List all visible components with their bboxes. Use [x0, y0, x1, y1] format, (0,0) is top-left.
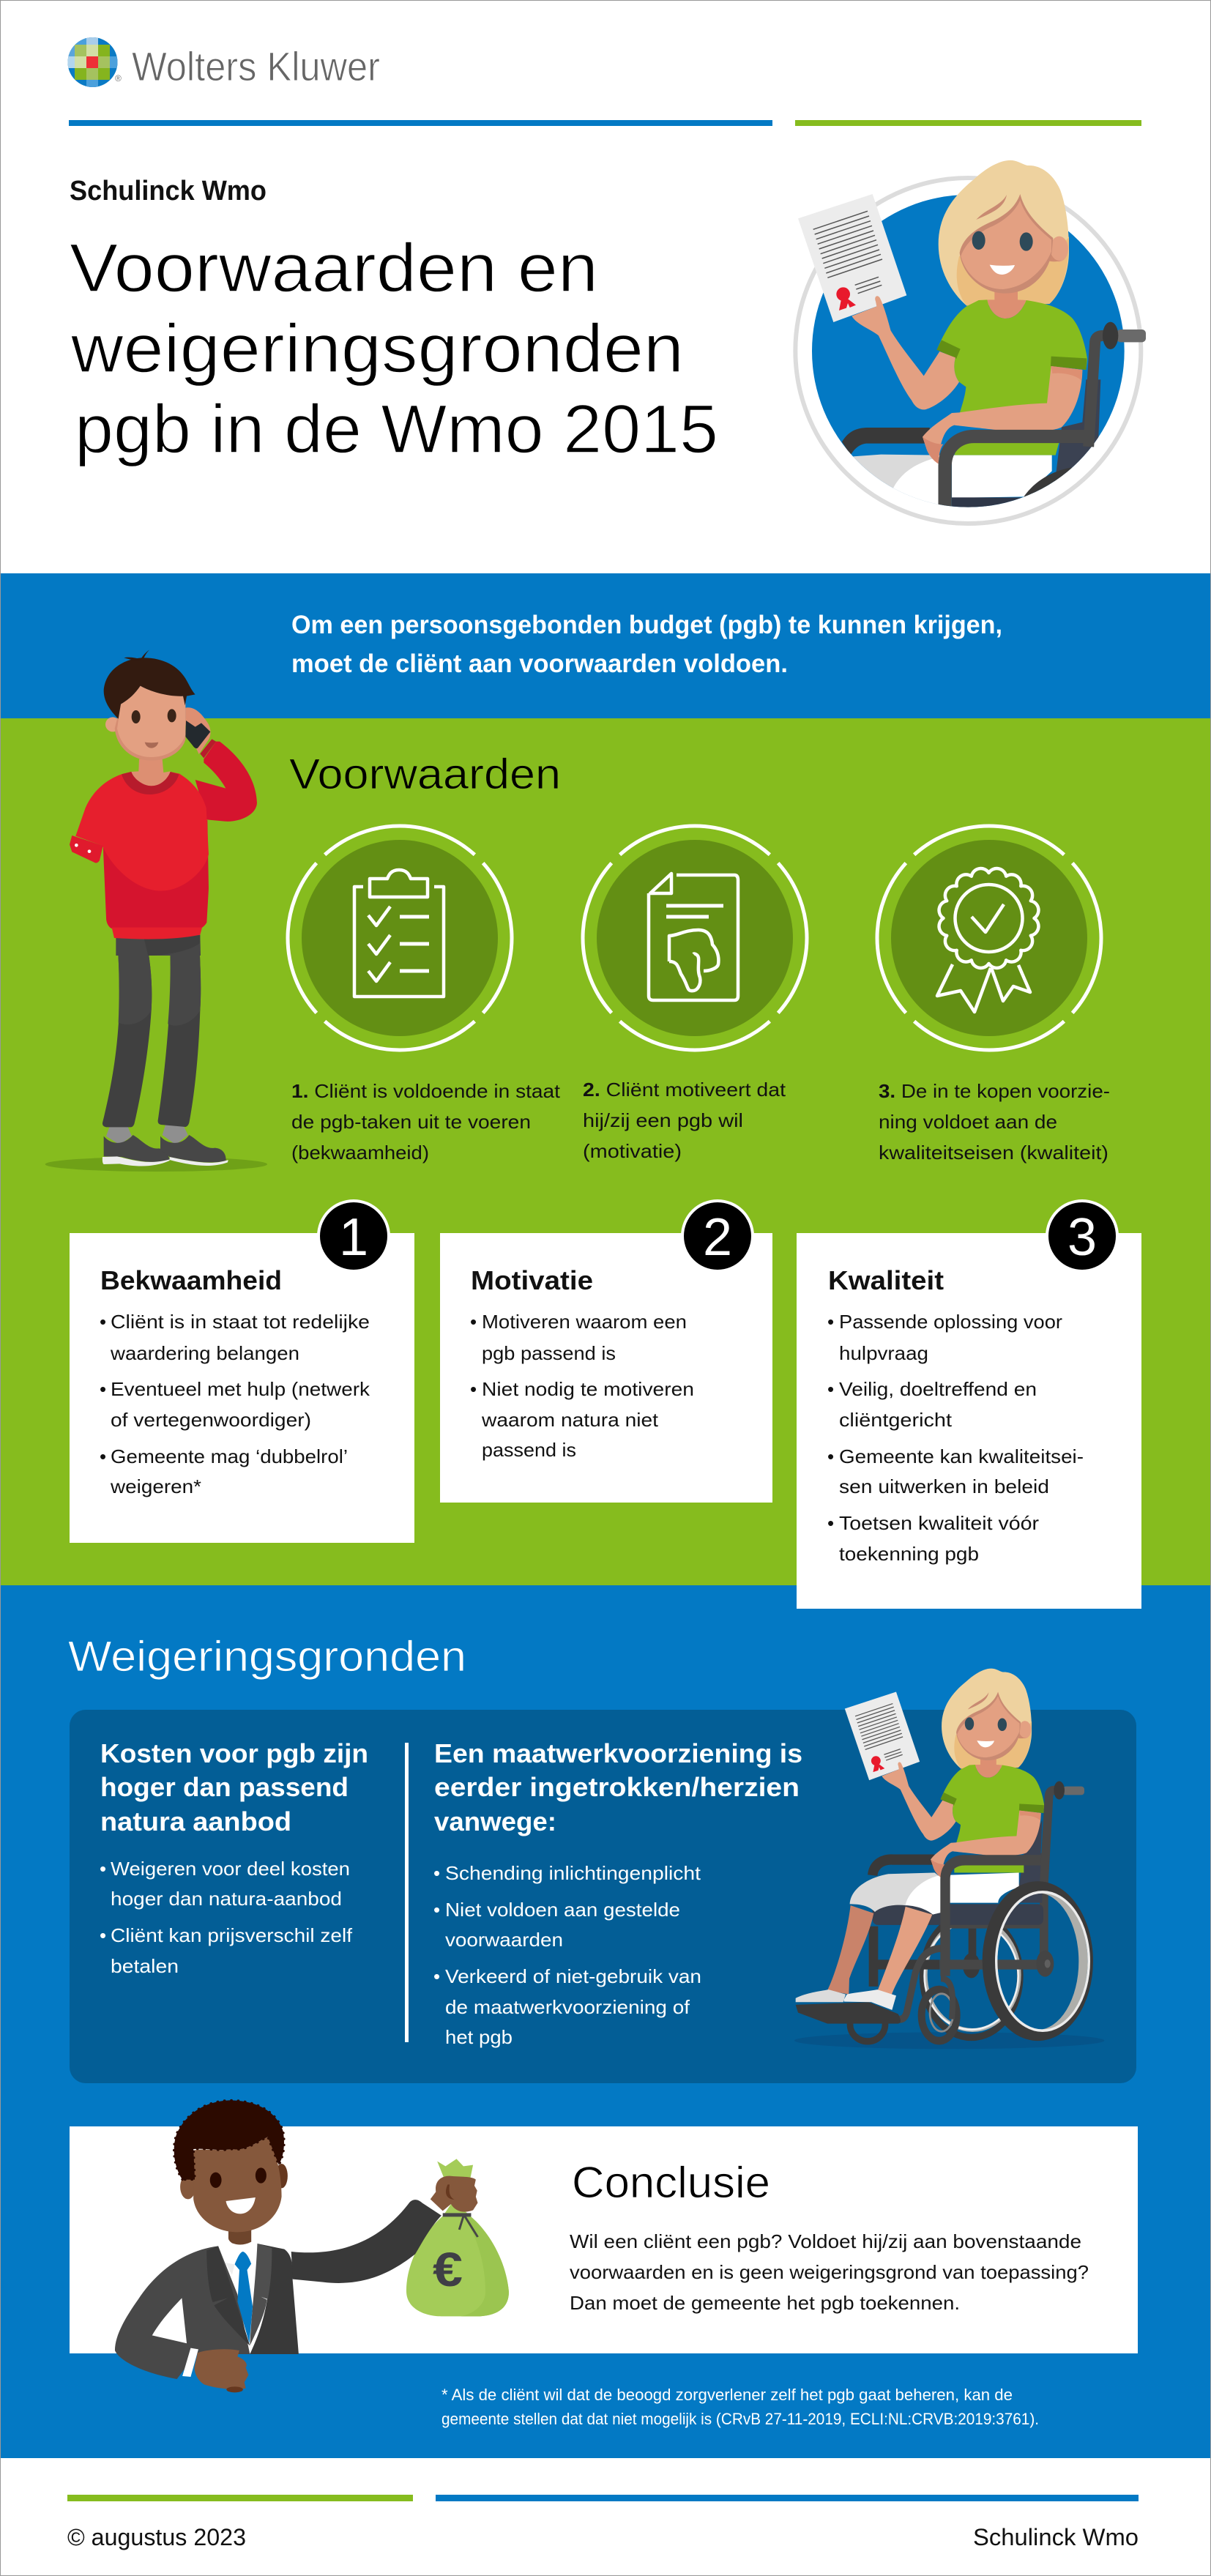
eyebrow: Schulinck Wmo: Schulinck Wmo: [70, 176, 267, 206]
illustration: woman in wheelchair holding certificate, in circle: [795, 160, 1146, 524]
footnote: gemeente stellen dat dat niet mogelijk is (CRvB 27-11-2019, ECLI:NL:CRVB:2019:3761).: [441, 2410, 1039, 2428]
card 3 bullets: Gemeente kan kwaliteitsei-: [839, 1445, 1084, 1467]
footer: brand: Schulinck Wmo: [973, 2524, 1139, 2550]
illustration: man on the phone in red sweater: [45, 649, 267, 1172]
footer rule bars: [67, 2495, 1139, 2501]
column 2 bullets: •: [433, 1965, 440, 1987]
column 1 heading: [100, 1738, 368, 1836]
card 3 bullets: cliëntgericht: [839, 1409, 953, 1431]
column 2 bullets: de maatwerkvoorziening of: [445, 1996, 690, 2018]
column 2 heading: Een maatwerkvoorziening is: [434, 1738, 802, 1768]
top rule bars: [69, 120, 1141, 126]
icon: checklist clipboard in circle: [288, 826, 512, 1050]
caption 1: 1. Cliënt is voldoende in staat: [291, 1080, 561, 1102]
conclusion text: Dan moet de gemeente het pgb toekennen.: [570, 2292, 960, 2314]
card: Motivatie: [440, 1199, 772, 1503]
caption 2: [583, 1079, 786, 1162]
card 1 bullets: •: [100, 1445, 106, 1467]
caption 2: (motivatie): [583, 1140, 682, 1162]
card 1 bullets: •: [100, 1378, 106, 1400]
card 3 bullets: •: [827, 1311, 834, 1333]
card 2 bullets: pgb passend is: [482, 1342, 616, 1364]
caption 2: hij/zij een pgb wil: [583, 1109, 743, 1131]
illustration: businessman with money bag: [115, 2100, 509, 2392]
card 3 bullets: •: [827, 1378, 834, 1400]
card 2 bullets: Niet nodig te motiveren: [482, 1378, 694, 1400]
column 2 bullets: •: [433, 1899, 440, 1921]
column 2 heading: eerder ingetrokken/herzien: [434, 1772, 800, 1802]
card 2 bullets: passend is: [482, 1439, 576, 1461]
intro text: moet de cliënt aan voorwaarden voldoen.: [291, 649, 788, 678]
card 1 bullets: •: [100, 1311, 106, 1333]
card 3 bullets: •: [827, 1445, 834, 1467]
euro sign: €: [433, 2242, 463, 2296]
column 1 bullets: •: [100, 1924, 106, 1946]
column 1 bullets: Weigeren voor deel kosten: [111, 1858, 350, 1880]
caption 3: [879, 1080, 1110, 1164]
column 2 bullets: voorwaarden: [445, 1929, 563, 1951]
badge 3: [1046, 1199, 1119, 1273]
column 2 bullets: Verkeerd of niet-gebruik van: [445, 1965, 701, 1987]
heading: Voorwaarden: Voorwaarden: [289, 751, 561, 798]
figure upper body: [798, 160, 1087, 464]
card 3 bullets: toekenning pgb: [839, 1543, 979, 1565]
icon: quality rosette in circle: [877, 826, 1101, 1050]
caption 3: ning voldoet aan de: [879, 1111, 1057, 1133]
footnote: * Als de cliënt wil dat de beoogd zorgverlener zelf het pgb gaat beheren, kan de: [441, 2386, 1013, 2404]
caption 3: kwaliteitseisen (kwaliteit): [879, 1142, 1108, 1164]
caption 3: 3. De in te kopen voorzie-: [879, 1080, 1110, 1102]
column 2 bullets: het pgb: [445, 2026, 513, 2048]
badge 3: 3: [1067, 1208, 1097, 1267]
card 2 bullets: •: [470, 1311, 477, 1333]
footer: copyright: © augustus 2023: [67, 2524, 246, 2550]
column 2 heading: vanwege:: [434, 1806, 556, 1836]
caption 1: [291, 1080, 561, 1164]
icon: logo globe: ®: [115, 73, 122, 83]
column 1 heading: Kosten voor pgb zijn: [100, 1738, 368, 1768]
icon: logo globe: [67, 37, 122, 89]
illustration: woman in wheelchair: [794, 1669, 1104, 2049]
title: pgb in de Wmo 2015: [75, 390, 718, 467]
column 2 heading: [434, 1738, 802, 1836]
column 2 bullets: Niet voldoen aan gestelde: [445, 1899, 680, 1921]
card 1 heading: Bekwaamheid: [100, 1265, 282, 1295]
card 3 bullets: hulpvraag: [839, 1342, 928, 1364]
column 1 bullets: betalen: [111, 1955, 179, 1977]
column 1 heading: hoger dan passend: [100, 1772, 349, 1802]
conclusion text: Wil een cliënt een pgb? Voldoet hij/zij aan bovenstaande: [570, 2230, 1081, 2252]
logo wordmark: Wolters Kluwer: [132, 43, 380, 89]
caption 2: 2. Cliënt motiveert dat: [583, 1079, 786, 1101]
panel: conclusie: [70, 2126, 1138, 2353]
heading: Conclusie: Conclusie: [572, 2158, 770, 2207]
card 1 bullets: Eventueel met hulp (netwerk: [111, 1378, 370, 1400]
conclusion text: [570, 2230, 1089, 2314]
card 1 bullets: waardering belangen: [110, 1342, 299, 1364]
title: weigeringsgronden: [70, 310, 684, 387]
card 2 bullets: [470, 1311, 694, 1461]
card 3 bullets: Passende oplossing voor: [839, 1311, 1062, 1333]
card 3 bullets: [827, 1311, 1084, 1565]
intro text: [291, 611, 1002, 678]
wheelchair figure upper body: [845, 1669, 1044, 1878]
card 1 bullets: [100, 1311, 370, 1497]
badge 2: 2: [703, 1208, 732, 1267]
card 2 bullets: waarom natura niet: [481, 1409, 659, 1431]
card 2 bullets: •: [470, 1378, 477, 1400]
panel: weigeringsgronden: [70, 1710, 1136, 2083]
card 3 bullets: Toetsen kwaliteit vóór: [839, 1512, 1039, 1534]
badge 2: [681, 1199, 754, 1273]
column 1 bullets: •: [100, 1858, 106, 1880]
conclusion text: voorwaarden en is geen weigeringsgrond van toepassing?: [570, 2261, 1089, 2283]
column 2 bullets: •: [433, 1862, 440, 1884]
intro text: Om een persoonsgebonden budget (pgb) te kunnen krijgen,: [291, 611, 1002, 639]
badge 1: [317, 1199, 390, 1273]
badge 1: 1: [339, 1208, 368, 1267]
card 3 bullets: Veilig, doeltreffend en: [839, 1378, 1037, 1400]
card 3 heading: Kwaliteit: [828, 1265, 944, 1295]
column 1 bullets: [100, 1858, 353, 1977]
column 1 heading: natura aanbod: [100, 1806, 291, 1836]
card 1 bullets: Gemeente mag ‘dubbelrol’: [111, 1445, 348, 1467]
caption 1: de pgb-taken uit te voeren: [291, 1111, 531, 1133]
column 2 bullets: Schending inlichtingenplicht: [445, 1862, 701, 1884]
column 2 bullets: [433, 1862, 701, 2048]
icon: document with thumb down in circle: [583, 826, 807, 1050]
heading: Weigeringsgronden: Weigeringsgronden: [68, 1633, 466, 1680]
card 2 bullets: Motiveren waarom een: [482, 1311, 687, 1333]
card 1 bullets: of vertegenwoordiger): [111, 1409, 311, 1431]
column 1 bullets: Cliënt kan prijsverschil zelf: [111, 1924, 353, 1946]
card 3 bullets: sen uitwerken in beleid: [839, 1475, 1049, 1497]
title: [70, 229, 718, 467]
title: Voorwaarden en: [70, 229, 598, 306]
card 2 heading: Motivatie: [471, 1265, 593, 1295]
card 1 bullets: Cliënt is in staat tot redelijke: [111, 1311, 370, 1333]
column 1 bullets: hoger dan natura-aanbod: [111, 1888, 342, 1910]
caption 1: (bekwaamheid): [291, 1142, 429, 1164]
card: Bekwaamheid: [70, 1199, 414, 1543]
card 1 bullets: weigeren*: [110, 1475, 201, 1497]
footnote: [441, 2386, 1039, 2428]
logo: Wolters Kluwer: [67, 37, 380, 89]
card 3 bullets: •: [827, 1512, 834, 1534]
card: Kwaliteit: [797, 1199, 1141, 1609]
